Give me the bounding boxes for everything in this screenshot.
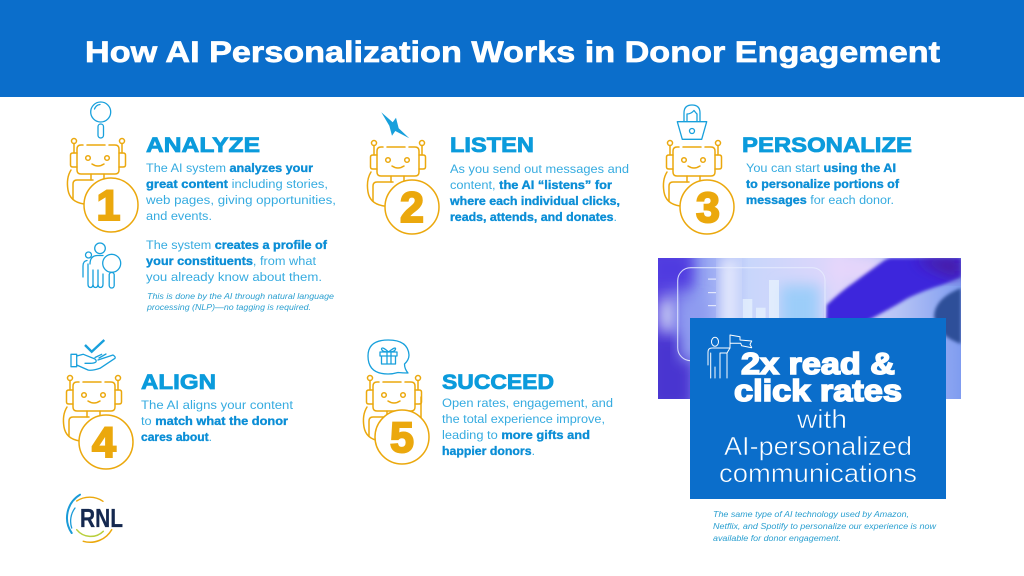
text: listen description [449, 162, 629, 224]
icon: magnifying glass [91, 102, 111, 138]
footnote: amazon netflix spotify: available for donor engagement. [713, 534, 841, 543]
text: succeed description [442, 396, 613, 458]
note: natural language processing: This is done by the AI through natural language [147, 292, 335, 301]
text: analyze description: great content including stories, [146, 177, 328, 191]
stat: 2x read and click rates [734, 346, 902, 408]
step 1: analyze [67, 102, 336, 312]
abstract photo: data dashboard [658, 258, 961, 399]
text: with ai-personalized communications: AI-personalized [724, 431, 912, 461]
text: succeed description: leading to more gifts and [442, 428, 590, 442]
icon: robot with number 5: 5 [390, 414, 414, 462]
text: analyze description: web pages, giving opportunities, [145, 193, 336, 207]
text: personalize description: You can start using the AI [746, 161, 896, 175]
text: align description: cares about. [141, 430, 212, 444]
logo: RNL: RNL [80, 503, 123, 533]
footnote: amazon netflix spotify: Netflix, and Spotify to personalize our experience is now [713, 522, 937, 531]
icon: robot with number 3 [663, 140, 734, 234]
footnote: amazon netflix spotify [713, 510, 937, 543]
icon: person at laptop [677, 105, 707, 139]
text: succeed description: Open rates, engagement, and [442, 396, 613, 410]
text: personalize description: to personalize portions of [746, 177, 900, 191]
title: How AI Personalization Works in Donor Engagement [85, 36, 940, 69]
text: analyze description: and events. [146, 209, 212, 223]
text: listen description: where each individual clicks, [449, 194, 620, 208]
step 3: personalize [663, 105, 912, 234]
icon: robot with number 1: 1 [97, 182, 120, 230]
heading: align: ALIGN [141, 370, 216, 394]
heading: succeed: SUCCEED [442, 370, 554, 394]
text: listen description: reads, attends, and donates. [450, 210, 617, 224]
icon: robot with number 3: 3 [696, 184, 720, 232]
icon: hand with checkmark [71, 340, 115, 370]
icon: robot with number 2 [367, 140, 439, 234]
text: constituent profile: you already know about them. [146, 270, 322, 284]
text: constituent profile: your constituents , from what [146, 254, 317, 268]
text: align description: to match what the donor [141, 414, 288, 428]
note: natural language processing [146, 292, 335, 312]
heading: analyze: ANALYZE [146, 133, 260, 157]
icon: robot with number 2: 2 [400, 184, 424, 232]
icon: robot with number 5 [363, 376, 429, 464]
text: listen description: content, the AI “listens” for [450, 178, 612, 192]
text: with ai-personalized communications: communications [719, 458, 917, 488]
logo: RNL [67, 495, 123, 542]
step 4: align [63, 340, 294, 469]
text: with ai-personalized communications: with [796, 404, 847, 434]
stat: 2x read and click rates: click rates [734, 373, 902, 408]
text: listen description: As you send out messages and [450, 162, 629, 176]
text: with ai-personalized communications [719, 404, 917, 488]
text: personalize description: messages for each donor. [746, 193, 894, 207]
step 2: listen [367, 112, 629, 234]
icon: robot with number 4: 4 [92, 419, 116, 467]
icon: robot with number 4 [63, 376, 133, 469]
text: align description: The AI aligns your content [141, 398, 294, 412]
icon: speech bubble with gift [368, 340, 409, 374]
footnote: amazon netflix spotify: The same type of AI technology used by Amazon, [713, 510, 909, 519]
text: constituent profile [146, 238, 328, 284]
text: personalize description [746, 161, 900, 207]
text: analyze description: The AI system analyzes your [146, 161, 313, 175]
header banner [0, 0, 1024, 97]
heading: personalize: PERSONALIZE [742, 133, 912, 157]
text: succeed description: the total experience improve, [442, 412, 605, 426]
text: align description [141, 398, 294, 444]
heading: listen: LISTEN [450, 133, 534, 157]
step 5: succeed [363, 340, 613, 464]
icon: person with flag [708, 335, 752, 378]
icon: robot with number 1 [67, 138, 138, 232]
stat: 2x read and click rates: 2x read & [741, 346, 895, 381]
text: succeed description: happier donors. [442, 444, 535, 458]
icon: constituents with magnifier [83, 243, 121, 288]
text: constituent profile: The system creates a profile of [146, 238, 328, 252]
text: analyze description [145, 161, 336, 223]
callout: 2x read and click rates [690, 318, 946, 499]
icon: lightning bolt [381, 112, 409, 138]
note: natural language processing: processing (NLP)—no tagging is required. [146, 303, 311, 312]
